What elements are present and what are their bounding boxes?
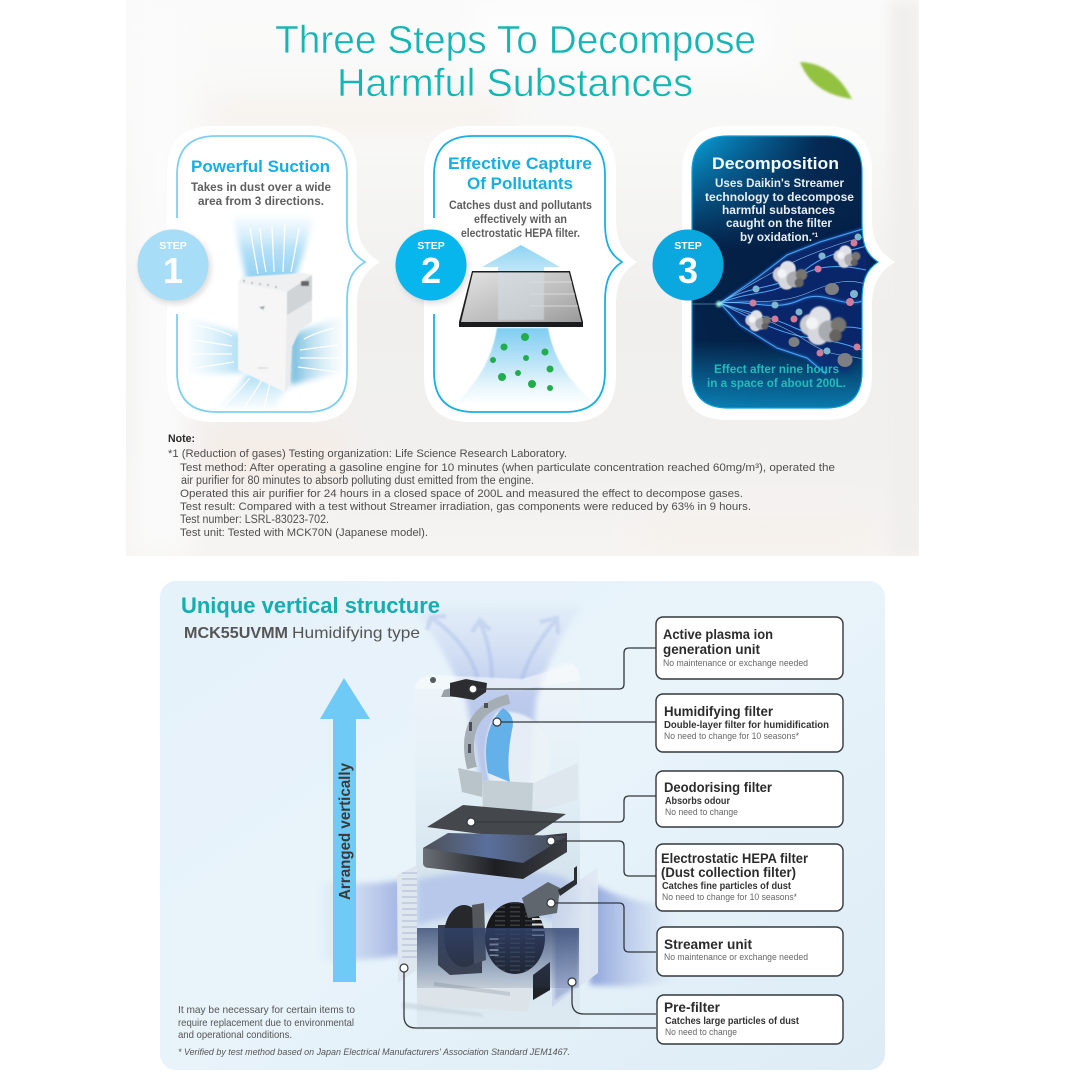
HEPA filter <box>423 833 567 879</box>
callout: humidifying filter: Humidifying filter <box>664 704 774 719</box>
purifier translucent body <box>415 662 580 1030</box>
central air band <box>417 869 578 925</box>
callout: active plasma ion generation unit: Active plasma ion <box>663 627 773 642</box>
callout: humidifying filter: Double-layer filter for humidification <box>664 720 829 731</box>
text: step 1 description: area from 3 directions. <box>198 194 324 208</box>
callout: streamer unit: No maintenance or exchange needed <box>664 952 808 963</box>
text: replacement note <box>178 1004 355 1041</box>
text: step 2 description <box>449 198 592 240</box>
text: effect after nine hours <box>707 362 846 390</box>
title: Three Steps To Decompose <box>275 19 756 62</box>
illustration: side and top airflow <box>318 880 676 986</box>
text: step 3 description: by oxidation. <box>740 230 812 244</box>
badge: step 2: 2 <box>421 250 441 291</box>
text block: test notes: Operated this air purifier for 24 hours in a closed space of 200L and measured the effect to decompose gases. <box>180 488 743 500</box>
text: step 3 description: harmful substances <box>722 203 835 217</box>
badge: step 1 <box>138 230 211 304</box>
badge: step 3 <box>652 230 724 300</box>
callout: active plasma ion generation unit: generation unit <box>663 642 761 657</box>
text block: test notes: Test result: Compared with a test without Streamer irradiation, gas components were reduced by 63% in 9 hours. <box>180 501 751 513</box>
callout: active plasma ion generation unit: No maintenance or exchange needed <box>663 658 808 669</box>
text: step 2 description: Catches dust and pollutants <box>449 198 592 212</box>
callout: streamer unit <box>657 927 843 976</box>
callout: pre-filter: Pre-filter <box>664 1000 721 1015</box>
streamer unit <box>522 866 577 918</box>
text: step 3 description: Uses Daikin's Streamer <box>715 176 844 190</box>
right pre-filter grille <box>552 867 598 1007</box>
text: step 3 description: caught on the filter <box>726 216 832 230</box>
heading: effective capture: Of Pollutants <box>467 174 573 193</box>
subheading: model: MCK55UVMM <box>184 625 288 642</box>
outline <box>177 136 365 412</box>
leader dots <box>400 685 576 986</box>
callout: deodorising filter: No need to change <box>665 807 738 818</box>
arrow: arranged vertically: Arranged vertically <box>337 763 354 900</box>
badge: step 2: STEP <box>417 240 445 252</box>
top air plume <box>412 606 582 790</box>
text: replacement note: It may be necessary for certain items to <box>178 1004 355 1016</box>
heading: unique vertical structure: Unique vertical structure <box>181 593 440 618</box>
badge: step 2 <box>396 230 469 304</box>
illustration: HEPA filter <box>459 271 583 327</box>
title <box>275 19 756 105</box>
text: replacement note: require replacement due to environmental <box>178 1017 354 1029</box>
text: step 3 description <box>705 176 854 244</box>
arrow: arranged vertically <box>320 678 370 982</box>
badge: step 3: 3 <box>678 250 698 291</box>
callout: electrostatic HEPA filter: Catches fine particles of dust <box>662 881 792 892</box>
base tray <box>402 962 550 1017</box>
text: verification footnote: * Verified by test method based on Japan Electrical Manufacturers' Association Standard JEM1467. <box>178 1047 570 1058</box>
text: replacement note: and operational conditions. <box>178 1029 292 1041</box>
illustration: green dust particles <box>490 333 554 391</box>
heading: decomposition: Decomposition <box>712 154 839 173</box>
title: Harmful Substances <box>337 62 693 105</box>
outline <box>692 136 878 408</box>
text: step 2 description: effectively with an <box>474 212 567 226</box>
deodorising filter <box>427 805 566 840</box>
illustration: suction air flows <box>186 217 343 408</box>
text: effect after nine hours: in a space of about 200L. <box>707 376 846 390</box>
callout: streamer unit: Streamer unit <box>664 937 753 952</box>
callout: electrostatic HEPA filter: (Dust collection filter) <box>661 865 796 880</box>
panel: step 1 powerful suction <box>167 126 380 422</box>
callout: electrostatic HEPA filter: No need to change for 10 seasons* <box>662 892 797 903</box>
callout: deodorising filter <box>656 771 843 827</box>
humidifying filter drum <box>458 699 578 813</box>
callout: deodorising filter: Absorbs odour <box>665 796 730 807</box>
text block: test notes: Test unit: Tested with MCK70N (Japanese model). <box>180 527 428 539</box>
dark lower housing <box>417 928 579 988</box>
icon: green leaf <box>800 62 852 99</box>
subheading: model: Humidifying type <box>292 625 420 642</box>
callout: pre-filter: No need to change <box>665 1027 737 1038</box>
illustration: air purifier <box>238 273 312 392</box>
illustration: streamer discharge <box>690 134 880 410</box>
illustration: purifier cutaway <box>397 606 598 1030</box>
callout: active plasma ion generation unit <box>656 617 843 679</box>
top face of the purifier <box>415 664 580 690</box>
plasma ion unit <box>430 677 487 700</box>
callout: humidifying filter: No need to change for 10 seasons* <box>664 731 799 742</box>
badge: step 1: STEP <box>159 240 187 252</box>
badge: step 1: 1 <box>163 250 183 291</box>
heading: powerful suction: Powerful Suction <box>191 157 330 176</box>
text: effect after nine hours: Effect after nine hours <box>714 362 839 376</box>
heading: effective capture: Effective Capture <box>448 154 592 173</box>
badge: step 3: STEP <box>674 240 702 252</box>
text: step 1 description: Takes in dust over a wide <box>191 180 331 194</box>
text block: test notes <box>168 433 835 539</box>
callout: deodorising filter: Deodorising filter <box>664 780 773 795</box>
leader lines <box>404 648 656 1028</box>
heading: effective capture <box>448 154 592 193</box>
callout: pre-filter: Catches large particles of dust <box>665 1016 800 1027</box>
text block: test notes: air purifier for 80 minutes to absorb polluting dust emitted from the engine. <box>181 475 534 487</box>
subheading: model <box>184 625 420 642</box>
callout: pre-filter <box>657 995 843 1044</box>
callout: electrostatic HEPA filter <box>656 844 843 911</box>
panel: unique vertical structure <box>160 581 885 1070</box>
callout: humidifying filter <box>656 694 843 752</box>
text block: test notes: Note: <box>168 433 195 445</box>
panel: step 2 effective capture <box>424 126 637 422</box>
outline <box>434 136 622 412</box>
panel: step 3 decomposition <box>682 126 895 420</box>
panel: top background photo <box>126 0 920 556</box>
text: step 1 description <box>191 180 331 208</box>
blower fan <box>438 902 545 975</box>
text block: test notes: Test method: After operating a gasoline engine for 10 minutes (when particulate concentration reached 60mg/m³), operated the <box>180 462 835 474</box>
callout: electrostatic HEPA filter: Electrostatic HEPA filter <box>661 851 809 866</box>
left pre-filter grille <box>397 865 417 983</box>
text: step 3 description: *1 <box>812 232 819 239</box>
illustration: airflow cone <box>456 245 594 402</box>
text: step 2 description: electrostatic HEPA filter. <box>461 226 580 240</box>
text block: test notes: Test number: LSRL-83023-702. <box>180 514 329 526</box>
text: step 3 description: technology to decompose <box>705 190 854 204</box>
text block: test notes: *1 (Reduction of gases) Testing organization: Life Science Research Laboratory. <box>168 448 567 460</box>
